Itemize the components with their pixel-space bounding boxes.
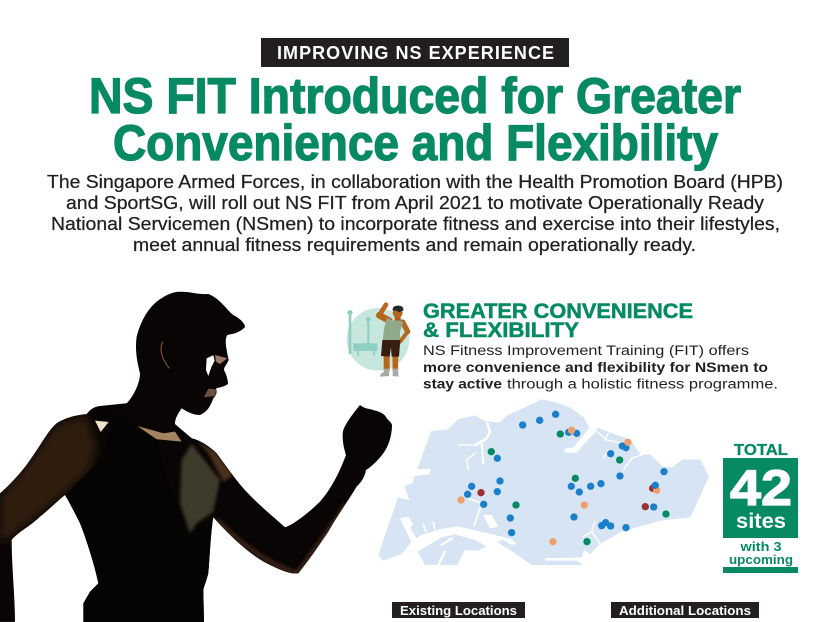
chest highlight	[180, 444, 220, 533]
shoulder skin	[197, 441, 233, 482]
icon: man exercising in park	[347, 305, 409, 377]
photo: runner silhouette	[0, 290, 400, 622]
mouth glint	[204, 389, 216, 397]
near arm skin tone	[0, 415, 97, 543]
orange dots	[457, 427, 660, 545]
legend: existing locations: Existing Locations	[400, 604, 517, 618]
arm rim light	[217, 503, 347, 573]
overlapping blue dot	[652, 482, 659, 489]
intro text block	[47, 172, 783, 255]
lamp posts and bench	[347, 310, 377, 356]
callout: total 42 sites: upcoming	[729, 552, 793, 567]
callout: total 42 sites: sites	[736, 510, 786, 533]
text block: NS FIT description: NS Fitness Improvement Training (FIT) offers	[423, 343, 749, 358]
torso tank	[65, 466, 212, 622]
ear highlight	[161, 342, 169, 368]
heading: greater convenience and flexibility: & FLEXIBILITY	[423, 319, 579, 342]
title	[89, 68, 741, 171]
intro text block: and SportSG, will roll out NS FIT from April 2021 to motivate Operationally Ready	[66, 193, 764, 213]
text block: NS FIT description: stay active	[423, 376, 503, 392]
title: Convenience and Flexibility	[113, 115, 718, 171]
map of Singapore	[379, 400, 708, 565]
heading: greater convenience and flexibility	[423, 300, 693, 342]
text block: NS FIT description: through a holistic fitness programme.	[507, 376, 778, 392]
callout: total 42 sites: with 3	[739, 539, 782, 554]
maroon dots	[477, 485, 656, 510]
banner: improving NS experience: IMPROVING NS EXPERIENCE	[277, 43, 554, 63]
figure	[379, 305, 408, 370]
intro text block: The Singapore Armed Forces, in collaboration with the Health Promotion Board (HPB)	[47, 172, 783, 192]
green dots	[488, 430, 670, 545]
eye glint	[206, 355, 215, 376]
neck highlight	[137, 426, 182, 442]
callout: total 42 sites: TOTAL	[734, 442, 788, 459]
water channels	[400, 517, 417, 542]
text block: NS FIT description: more convenience and flexibility for NSmen to	[423, 360, 768, 375]
southern islands	[418, 534, 487, 565]
legend: additional locations: Additional Locations	[619, 604, 751, 618]
blue dots: existing locations	[464, 411, 668, 536]
intro text block: National Servicemen (NSmen) to incorporate fitness and exercise into their lifestyles,	[51, 214, 780, 234]
heading: greater convenience and flexibility: GREATER CONVENIENCE	[423, 300, 693, 323]
title: NS FIT Introduced for Greater	[89, 68, 741, 124]
text block: NS FIT description	[423, 343, 778, 392]
callout: total 42 sites: 42	[730, 460, 792, 516]
shoulder glint	[95, 421, 109, 432]
intro text block: meet annual fitness requirements and remain operationally ready.	[133, 235, 696, 255]
callout: total 42 sites	[723, 442, 798, 573]
banner: improving NS experience	[261, 38, 569, 67]
landmass	[379, 400, 708, 560]
